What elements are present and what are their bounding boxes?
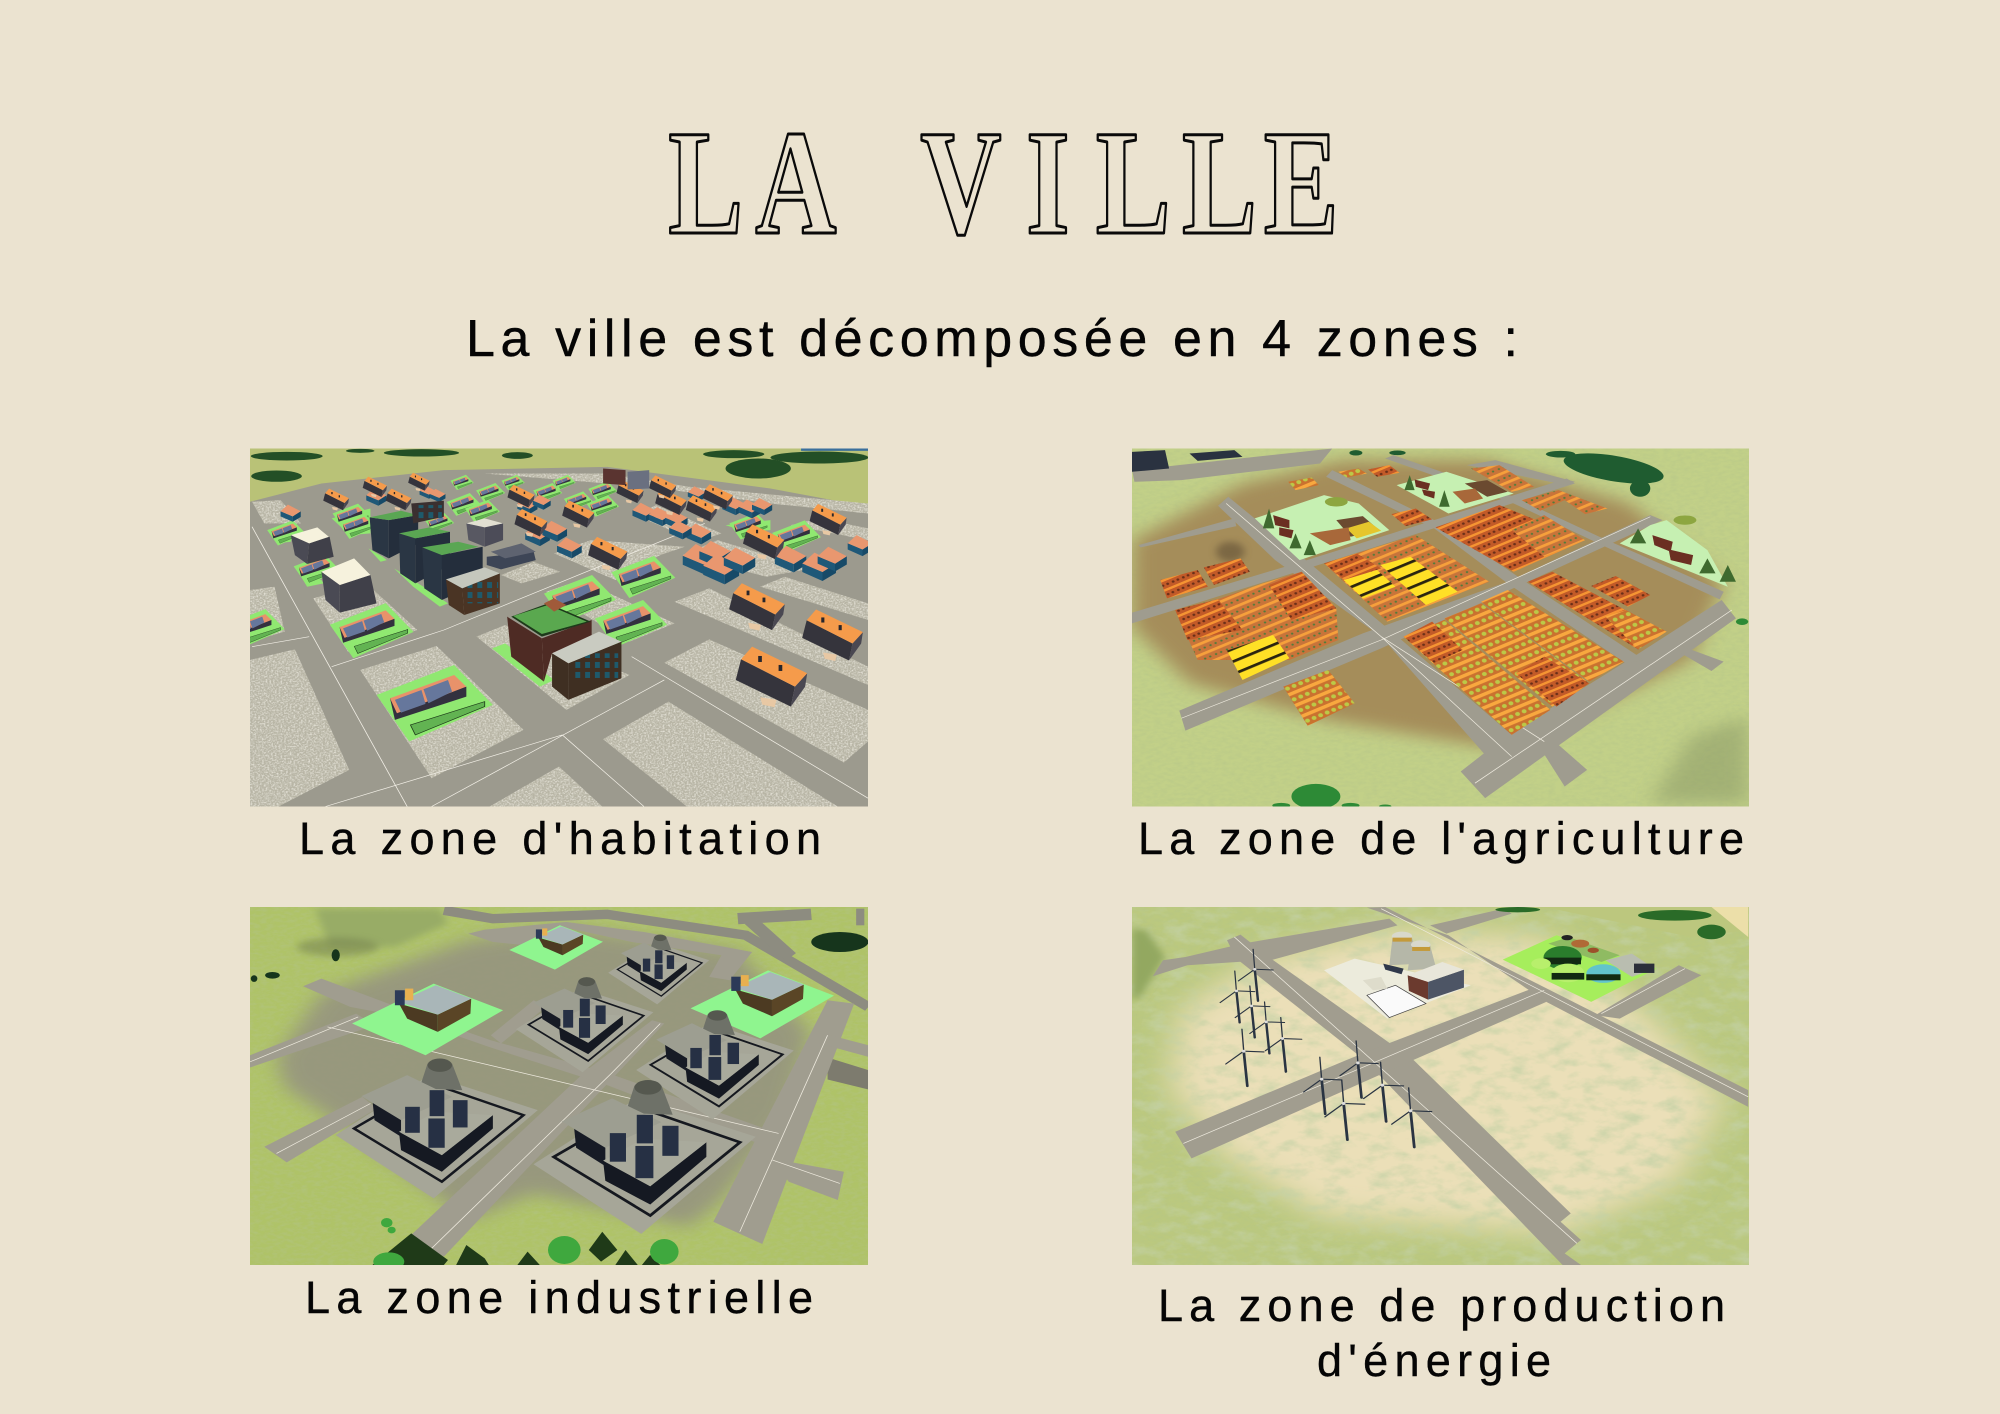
image: farming district <box>1132 448 1749 806</box>
caption: production d'énergie <box>1158 1280 1725 1386</box>
subtitle: La ville est décomposée en 4 zones : <box>466 310 1518 368</box>
panel: zone de l'agriculture <box>1132 447 1749 864</box>
caption: production d'énergie: d'énergie <box>1317 1335 1551 1386</box>
panel: zone industrielle <box>250 907 868 1323</box>
caption: habitation: La zone d'habitation <box>299 813 821 864</box>
caption: industrielle: La zone industrielle <box>305 1272 813 1323</box>
image: energy production district <box>1132 907 1749 1265</box>
panel: zone d'habitation <box>227 448 872 864</box>
panel: zone de production d'énergie <box>1132 907 1749 1386</box>
caption: production d'énergie: La zone de production <box>1158 1280 1725 1331</box>
caption: agriculture: La zone de l'agriculture <box>1138 813 1744 864</box>
image: industrial district <box>250 907 868 1265</box>
title: LA VILLE <box>0 99 1339 266</box>
image: residential district <box>250 448 868 806</box>
